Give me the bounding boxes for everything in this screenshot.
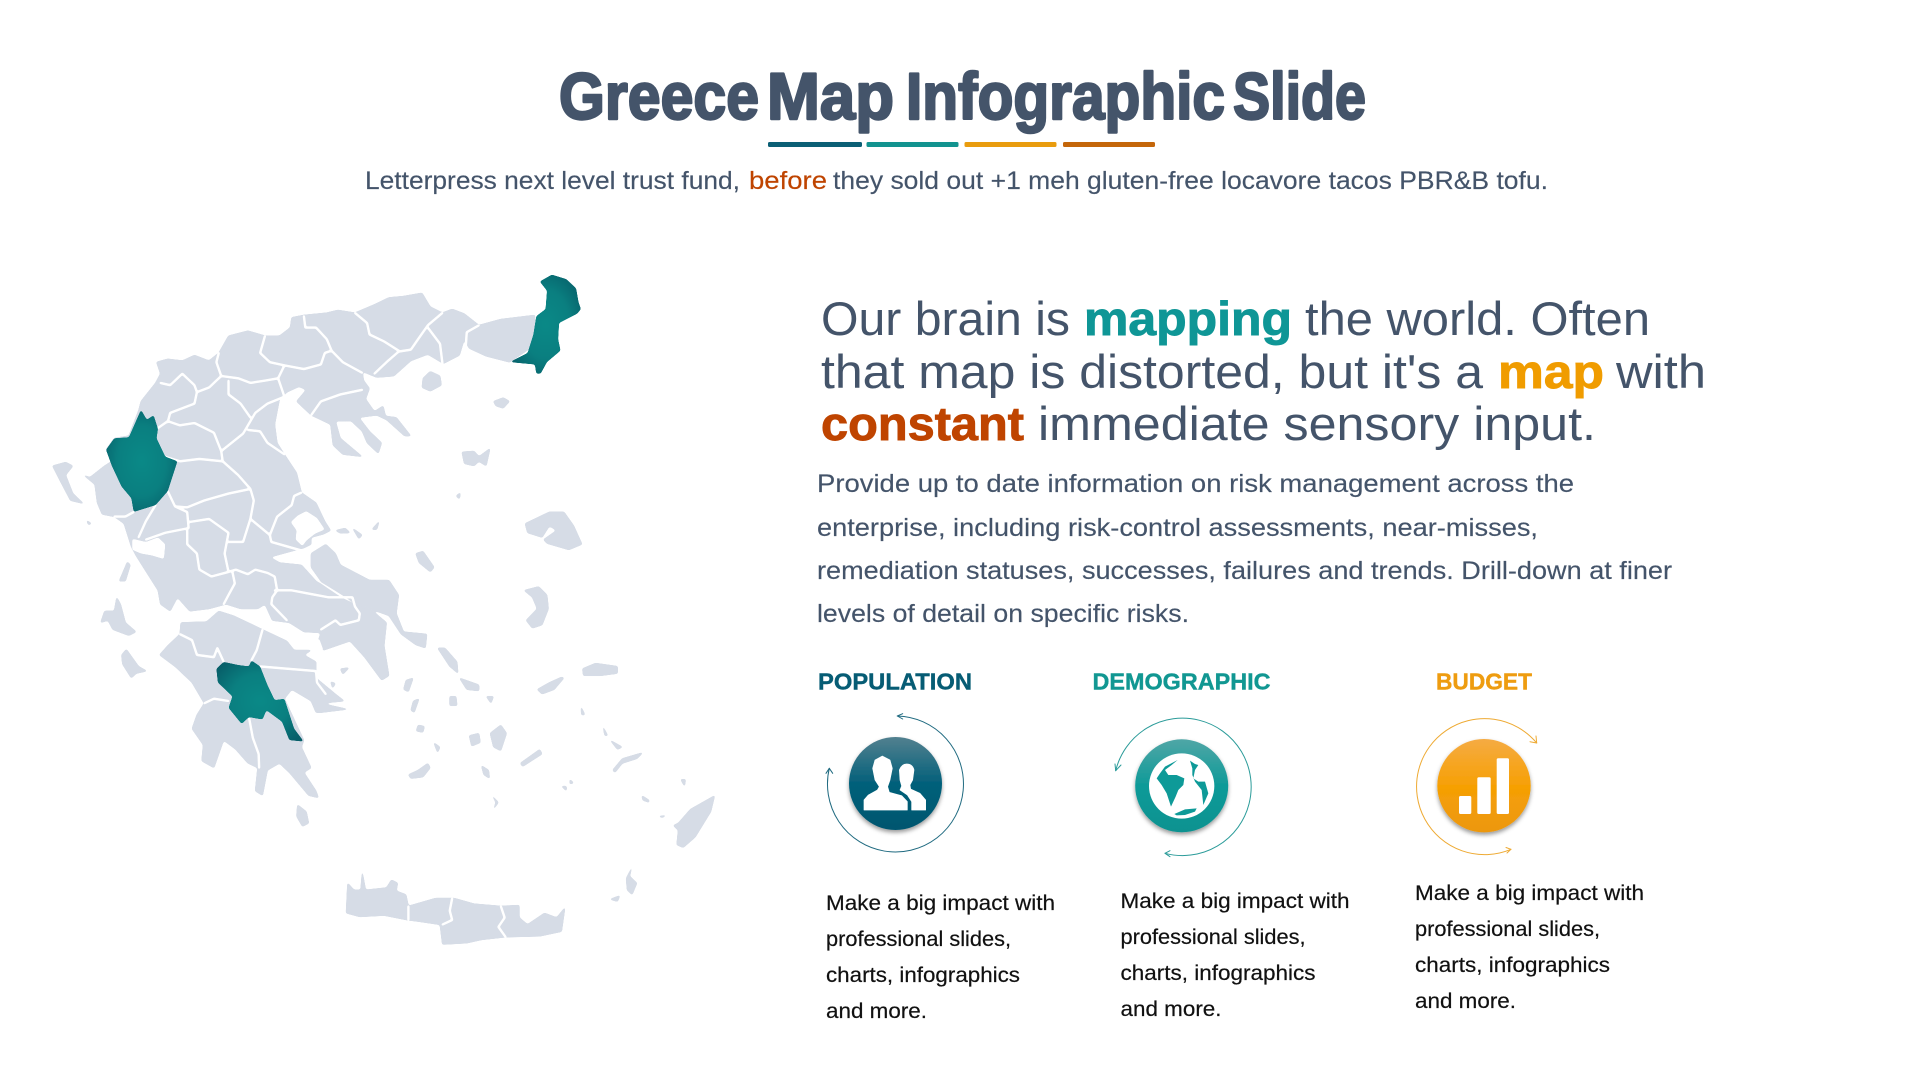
title: Slide [1233,59,1366,133]
highlighted region: Ioannina [106,410,177,512]
body text: population: Make a big impact with [826,892,1055,915]
heading: demographic: DEMOGRAPHIC [1092,668,1270,694]
subtitle [365,167,1548,195]
title [559,59,1366,133]
paragraph: Provide up to date information on risk management across the [817,470,1574,498]
subtitle: they sold out +1 meh gluten-free locavore tacos PBR&B tofu. [833,167,1548,195]
headline: immediate sensory input. [1038,397,1596,450]
headline: mapping [1084,292,1292,345]
Ambracian and Pagasetic gulfs [132,511,325,559]
headline: the world. Often [1305,292,1650,345]
body text: population [826,892,1055,1023]
headline [821,292,1706,450]
paragraph [817,470,1672,628]
title: Infographic [906,59,1225,133]
title: Greece [559,59,759,133]
panel: budget [1415,668,1644,1013]
ring arrows: population [826,714,963,852]
ring arrows: budget [1417,719,1537,855]
panel: demographic [1092,668,1350,1021]
body text: demographic: and more. [1120,998,1222,1021]
headline: Our brain is [821,292,1070,345]
heading: budget: BUDGET [1436,668,1532,694]
land masses [53,293,715,944]
title underline bars [768,142,1155,147]
body text: budget: and more. [1415,990,1516,1013]
paragraph: remediation statuses, successes, failures and trends. Drill-down at finer [817,557,1672,585]
body text: budget [1415,882,1644,1013]
body text: population: professional slides, [826,928,1011,951]
icon: bar chart [1437,739,1531,832]
body text: demographic: professional slides, [1120,926,1306,949]
highlighted region: Evros [510,275,581,374]
panel: population [818,668,1055,1023]
headline: map [1498,345,1604,398]
paragraph: enterprise, including risk-control assessments, near-misses, [817,514,1538,542]
subtitle: Letterpress next level trust fund, [365,167,740,195]
regional borders [114,313,506,937]
body text: population: charts, infographics [826,964,1020,987]
icon: globe [1135,739,1228,832]
headline: with [1615,345,1706,398]
subtitle: before [749,167,827,195]
map of Greece [53,275,715,944]
headline: constant [821,397,1024,450]
ring arrows: demographic [1115,718,1251,857]
paragraph: levels of detail on specific risks. [817,600,1189,628]
body text: population: and more. [826,1000,927,1023]
title: Map [767,59,894,133]
body text: budget: professional slides, [1415,918,1600,941]
headline: that map is distorted, but it's a [821,345,1484,398]
heading: population: POPULATION [818,668,972,694]
highlighted region: Arcadia [216,660,304,742]
body text: demographic: charts, infographics [1120,962,1316,985]
body text: demographic [1120,890,1350,1021]
body text: budget: Make a big impact with [1415,882,1644,905]
icon: people [849,737,942,830]
body text: budget: charts, infographics [1415,954,1610,977]
body text: demographic: Make a big impact with [1120,890,1350,913]
